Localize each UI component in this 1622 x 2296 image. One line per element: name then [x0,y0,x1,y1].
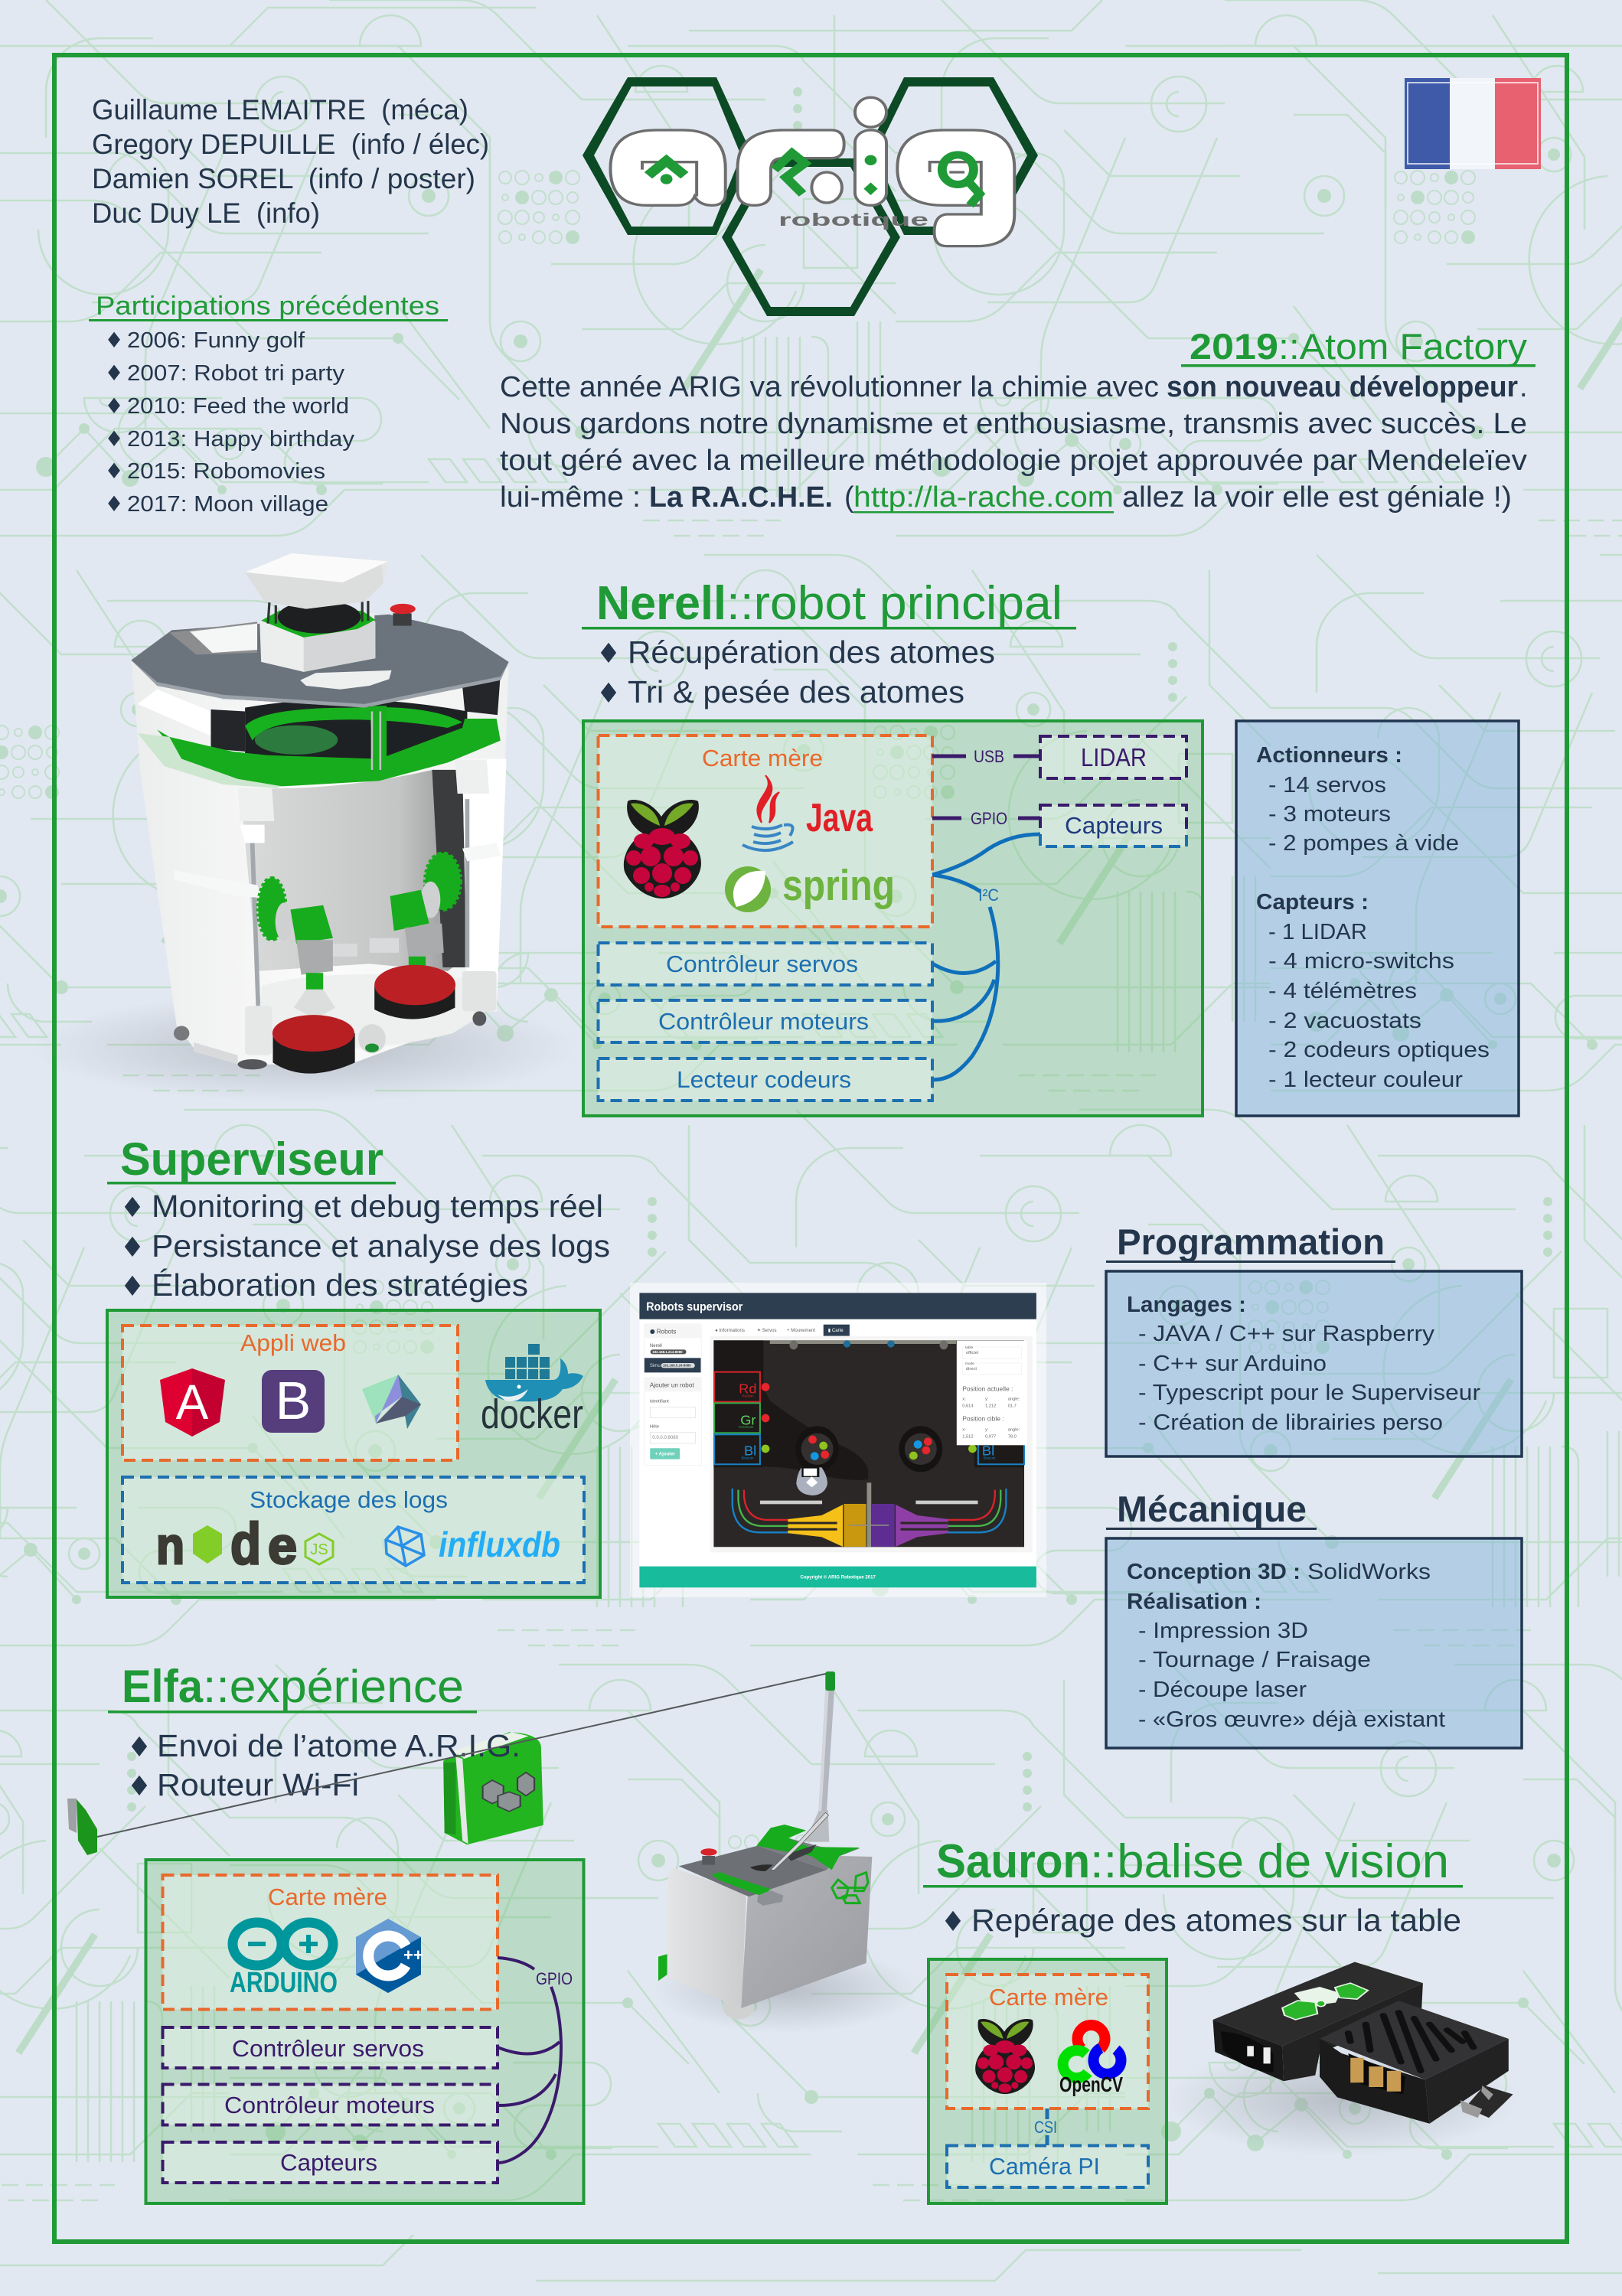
list: Superviseur features: ♦ [120,1192,145,1224]
panel: Superviseur stack [107,1310,600,1597]
icon: raspberry pi [975,2019,1035,2094]
screenshot sidebar: Nerell [650,1344,662,1349]
heading: 2019 Atom Factory: ::Atom Factory [1278,326,1528,367]
screenshot tabs: ✦ Servos [757,1328,777,1333]
box: Capteurs: Capteurs [280,2149,377,2176]
heading: 2019 Atom Factory: 2019 [1190,326,1278,367]
screenshot game table map: Blueium [742,1456,754,1460]
text: Capteurs list: - 2 vacuostats [1268,1009,1421,1033]
screenshot header [639,1293,1036,1319]
icon: C++ [356,1919,423,1993]
text block: intro paragraph: La R.A.C.H.E. [649,481,833,514]
box: Contrôleur moteurs [599,1000,932,1042]
text: Actionneurs list: Actionneurs : [1256,743,1402,768]
text block: intro paragraph: Cette année ARIG va révolutionner la chimie avec [500,371,1159,403]
box: Contrôleur moteurs: Contrôleur moteurs [658,1008,869,1035]
box: Stockage des logs: Stockage des logs [250,1486,448,1513]
image: Elfa left support and wire [67,1673,829,1855]
screenshot position overlay: y: [985,1397,989,1402]
supervisor map robot [796,1467,827,1495]
box: LIDAR: LIDAR [1081,743,1147,771]
list of participations: 2006: Funny golf [127,328,305,353]
list of participations: 2015: Robomovies [127,459,325,484]
text: Capteurs list: - 1 lecteur couleur [1268,1068,1463,1092]
text: languages list: - C++ sur Arduino [1138,1352,1327,1376]
screenshot sidebar: + Ajouter [655,1452,676,1456]
icon: java [742,775,873,850]
icon: OpenCV [1059,2025,1123,2096]
icon: French flag [1405,78,1541,169]
text: Actionneurs list: - 2 pompes à vide [1268,831,1459,856]
screenshot position overlay [957,1341,1027,1445]
text: languages list: - JAVA / C++ sur Raspberry [1138,1322,1435,1346]
heading: Superviseur: Superviseur [120,1133,383,1185]
text: mechanics list: - Impression 3D [1138,1619,1308,1643]
screenshot tabs [715,1325,850,1336]
screenshot position overlay: Position cible : [962,1415,1004,1423]
icon: angular [160,1368,225,1437]
heading: Sauron balise de vision [923,1835,1463,1888]
screenshot game table map: Bl [982,1443,994,1458]
icon: arduino [230,1923,338,1999]
box: LIDAR [1040,736,1186,778]
list: Elfa features: ♦ [127,1771,152,1802]
text: languages list [1127,1293,1480,1435]
text: mechanics list [1127,1560,1445,1732]
connector: CSI: CSI [1034,2118,1057,2137]
heading: Nerell robot principal [582,577,1076,630]
text block: intro paragraph: allez la voir elle est géniale !) [1122,481,1512,514]
text block: intro paragraph: http://la-rache.com [853,481,1114,514]
box: Contrôleur servos [599,943,932,985]
screenshot position overlay: 1,512 [962,1434,974,1439]
list: Elfa features: Routeur Wi-Fi [157,1767,359,1802]
list: Superviseur features [120,1189,610,1303]
list: Nerell missions [596,634,995,709]
list of participations: ♦ [104,393,124,419]
text: mechanics list: Réalisation : [1127,1590,1261,1614]
screenshot game table map: Greenium [739,1425,754,1429]
connector: USB to LIDAR: USB [974,747,1004,766]
list: Nerell missions: Récupération des atomes [628,634,995,670]
box: Capteurs [162,2142,498,2183]
screenshot position overlay: angle: [1008,1397,1020,1402]
box: Lecteur codeurs: Lecteur codeurs [677,1066,851,1093]
text: Capteurs list: - 4 micro-switchs [1268,949,1454,974]
box: Capteurs: Capteurs [1065,812,1163,839]
panel: Nerell architecture [583,721,1203,1116]
screenshot position overlay: Position actuelle : [962,1384,1013,1392]
list of participations: 2007: Robot tri party [127,361,345,386]
text: Capteurs list: Capteurs : [1256,890,1369,915]
text block: intro paragraph: ( [844,481,854,514]
panel: Elfa architecture [145,1860,583,2203]
box: Carte mère [947,1975,1148,2108]
text: mechanics list: - Découpe laser [1138,1678,1307,1702]
screenshot position overlay: 1,212 [985,1404,996,1409]
box: Carte mère [162,1875,498,2010]
panel: Sauron architecture [928,1959,1167,2203]
list of participations: ♦ [104,426,124,452]
connector: I2C bus [932,834,1040,1080]
screenshot game table map: Redium [742,1394,754,1398]
list: Elfa features: ♦ [127,1732,152,1763]
text block: team members [92,94,489,229]
icon: prism [362,1375,421,1429]
image: Sauron vision beacon [1166,1962,1517,2156]
list: Nerell missions: Tri & pesée des atomes [628,674,964,709]
list of participations [104,328,355,517]
icon: nodejs [156,1512,333,1577]
panel: actuators and sensors [1236,721,1519,1116]
connector: I2C bus: I²C [978,885,999,905]
box: Contrôleur servos: Contrôleur servos [232,2035,424,2062]
box: Carte mère: Carte mère [702,745,823,771]
connector: CSI [1034,2108,1057,2145]
list of participations: 2013: Happy birthday [127,427,355,452]
screenshot sidebar: Identifiant [650,1399,669,1404]
box: Stockage des logs [122,1477,584,1583]
list: Superviseur features: Monitoring et debug temps réel [152,1189,603,1224]
text: mechanics list: Conception 3D : [1127,1560,1301,1584]
text block: intro paragraph [500,371,1528,514]
heading: 2019 Atom Factory [1181,326,1536,367]
icon: nodejs: d [230,1512,261,1577]
screenshot sidebar [645,1324,701,1465]
list of participations: ♦ [104,360,124,386]
text: Actionneurs list: - 3 moteurs [1268,802,1391,827]
screenshot footer [639,1567,1036,1587]
screenshot sidebar: Robots [657,1328,676,1335]
heading: Programmation: Programmation [1117,1221,1385,1262]
heading: Elfa expérience: Elfa [122,1661,204,1712]
list: Superviseur features: Persistance et analyse des logs [152,1228,610,1264]
screenshot position overlay: x: [962,1427,966,1432]
box: Carte mère: Carte mère [268,1883,387,1910]
list: Superviseur features: ♦ [120,1232,145,1264]
text block: intro paragraph: lui-même : [500,481,641,514]
heading: participations: Participations précédentes [96,292,439,321]
list: Nerell missions: ♦ [596,678,621,709]
box: Appli web: Appli web [240,1329,346,1356]
image: supervisor screenshot [630,1283,1046,1597]
icon: bootstrap [262,1370,325,1433]
heading: Mécanique: Mécanique [1117,1489,1307,1529]
text block: intro paragraph: tout géré avec la meilleure méthodologie projet approuvée par Mendeleïev [500,445,1527,477]
screenshot footer: Copyright © ARIG Robotique 2017 [800,1575,876,1580]
screenshot position overlay: 0,977 [985,1434,996,1439]
list: Elfa features [127,1728,521,1802]
text: Capteurs list: - 4 télémètres [1268,979,1417,1003]
panel: Mécanique [1106,1538,1522,1748]
screenshot sidebar: 0.0.0.0:8080 [652,1436,679,1440]
icon: raspberry pi [624,800,701,899]
screenshot tabs: ● Informations [715,1329,745,1333]
list: Nerell missions: ♦ [596,638,621,670]
box: Carte mère: Carte mère [989,1984,1108,2011]
connector: GPIO to capteurs: GPIO [971,809,1007,828]
text block: team members: Guillaume LEMAITRE (méca) [92,94,468,126]
icon: influxdb: influxdb [439,1525,560,1564]
screenshot position overlay: officiel [966,1351,978,1355]
text: mechanics list: SolidWorks [1307,1560,1431,1584]
heading: Sauron balise de vision: Sauron [936,1835,1090,1888]
screenshot game table map: Blueium [984,1456,996,1460]
icon: angular: A [176,1375,209,1430]
screenshot sidebar: Hôte [650,1425,659,1430]
icon: bootstrap: B [276,1371,311,1430]
icon: OpenCV: OpenCV [1059,2073,1123,2096]
text: Capteurs list: - 1 LIDAR [1268,920,1367,944]
logo: ARIG robotique [583,77,1038,316]
screenshot game table map: Bl [744,1443,756,1458]
icon: spring: spring [782,861,895,910]
icon: influxdb [386,1525,560,1566]
list: Superviseur features: ♦ [120,1271,145,1303]
text block: team members: Damien SOREL (info / poster) [92,163,475,194]
text: Capteurs list: - 2 codeurs optiques [1268,1038,1490,1062]
screenshot tabs: ▮ Carte [828,1329,844,1333]
text: Actionneurs list [1256,743,1459,856]
list: Sauron features: ♦ [941,1906,965,1938]
text block: team members: Gregory DEPUILLE (info / élec) [92,129,489,160]
list: Sauron features: Repérage des atomes sur la table [971,1903,1461,1938]
list of participations: 2010: Feed the world [127,394,349,419]
icon: java: Java [806,796,873,840]
connector: GPIO bus [498,1958,573,2163]
text block: intro paragraph: . [1519,371,1528,403]
screenshot header: Robots supervisor [646,1300,743,1314]
screenshot position overlay: 01,7 [1008,1404,1017,1409]
box: Caméra PI: Caméra PI [989,2153,1100,2180]
list of participations: 2017: Moon village [127,492,328,517]
text: languages list: Langages : [1127,1293,1246,1317]
screenshot position overlay: angle: [1008,1427,1020,1432]
text block: intro paragraph: Nous gardons notre dynamisme et enthousiasme, transmis avec succès. Le [500,408,1527,440]
screenshot position overlay: x: [962,1397,966,1402]
icon: docker: docker [481,1391,583,1437]
text: mechanics list: - «Gros œuvre» déjà existant [1138,1707,1445,1732]
screenshot game table map: Gr [740,1412,756,1427]
text: Actionneurs list: - 14 servos [1268,773,1386,797]
panel: Programmation languages [1106,1271,1522,1456]
screenshot position overlay: y: [985,1427,989,1432]
list: Elfa features: Envoi de l’atome A.R.I.G. [157,1728,521,1763]
screenshot position overlay: table [965,1345,974,1349]
screenshot position overlay: 0,614 [962,1404,974,1409]
list of participations: ♦ [104,328,124,353]
box: Caméra PI [947,2146,1148,2187]
heading: Elfa expérience [108,1661,477,1713]
text block: team members: Duc Duy LE (info) [92,197,320,229]
screenshot position overlay: direct [966,1367,977,1371]
icon: nodejs: n [156,1517,184,1575]
screenshot tabs: + Mouvement [787,1329,815,1333]
text: Capteurs list [1256,890,1490,1092]
screenshot game table map [713,1340,1024,1547]
box: Lecteur codeurs [599,1058,932,1101]
screenshot sidebar: 192.168.0.24:8080 [663,1364,691,1368]
list of participations: ♦ [104,458,124,484]
logo: ARIG robotique: robotique [778,210,928,230]
heading: Sauron balise de vision: ::balise de vision [1090,1835,1449,1888]
icon: arduino: ARDUINO [230,1967,338,1999]
screenshot position overlay: mode [965,1362,974,1365]
heading: Nerell robot principal: ::robot principal [726,577,1062,630]
box: Carte mère [599,735,932,927]
box: Capteurs [1040,805,1186,846]
connector: GPIO bus: GPIO [536,1969,573,1988]
panel: previous participations [89,292,448,517]
icon: C++: ++ [403,1945,423,1965]
icon: docker [481,1344,583,1437]
heading: Elfa expérience: ::expérience [203,1661,464,1712]
box: Appli web [122,1326,458,1460]
screenshot sidebar: Simu [650,1364,661,1368]
screenshot game table map: Rd [739,1381,757,1397]
box: Contrôleur servos: Contrôleur servos [666,951,858,977]
list of participations: ♦ [104,491,124,517]
screenshot sidebar: Ajouter un robot [650,1381,694,1388]
screenshot sidebar: 192.168.1.214:8080 [652,1350,683,1354]
icon: spring [725,861,895,912]
box: Contrôleur moteurs [162,2085,498,2125]
text: languages list: - Création de librairies perso [1138,1411,1443,1435]
image: Nerell robot [33,553,579,1103]
box: Contrôleur servos [162,2027,498,2068]
icon: nodejs: e [268,1517,297,1575]
heading: Nerell robot principal: Nerell [596,577,726,630]
text: mechanics list: - Tournage / Fraisage [1138,1648,1371,1672]
box: Contrôleur moteurs: Contrôleur moteurs [224,2092,435,2118]
image: Elfa robot [653,1671,919,2033]
screenshot position overlay: 78,0 [1008,1434,1017,1439]
list: Superviseur features: Élaboration des stratégies [152,1267,528,1303]
text block: intro paragraph: son nouveau développeur [1167,371,1518,403]
icon: nodejs: JS [310,1541,328,1558]
image: Elfa green cube [443,1732,543,1844]
text: languages list: - Typescript pour le Superviseur [1138,1381,1480,1405]
